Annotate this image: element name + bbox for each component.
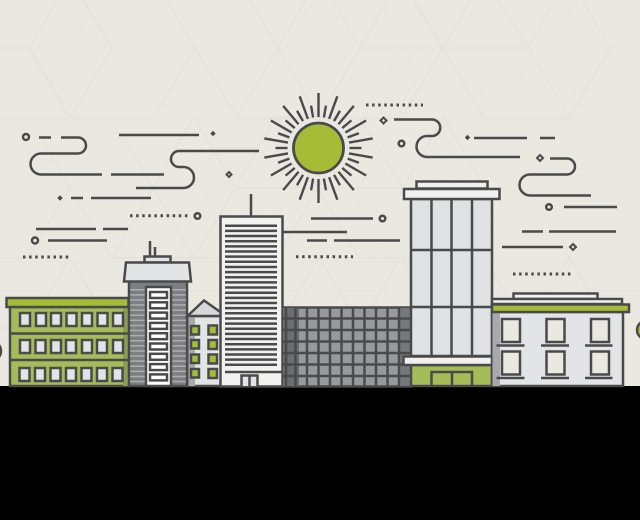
building: right low-rise with green band xyxy=(492,294,629,386)
building: striped tower with roof antennas xyxy=(124,241,191,386)
wind lines: right sky xyxy=(394,120,617,274)
building: small gabled house xyxy=(188,300,226,386)
black footer band xyxy=(0,386,640,520)
background hexagon pattern xyxy=(0,0,640,398)
wind lines: left sky xyxy=(23,132,259,257)
edge circle: right xyxy=(637,321,640,339)
building: green office block xyxy=(6,298,128,386)
edge circle: left xyxy=(0,341,1,361)
building: tall glass tower xyxy=(404,182,500,386)
building: dark glass grid block xyxy=(283,307,411,386)
sun xyxy=(264,93,373,203)
building: white striped skyscraper xyxy=(220,194,282,386)
wind lines: centre sky xyxy=(283,105,423,257)
